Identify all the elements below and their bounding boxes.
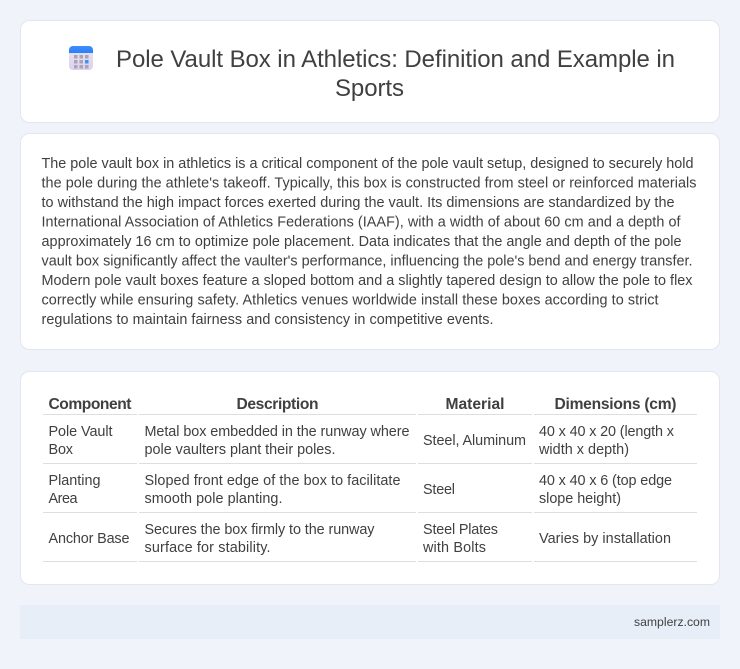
table row: anchor base: Secures the box firmly to the runway [144,522,375,538]
table row: planting area: Area [48,491,78,507]
table row: pole vault box: Pole Vault [48,424,112,440]
table row: pole vault box: Steel, Aluminum [423,433,526,449]
text block: description paragraph: International Association of Athletics Federations (IAAF), with a width of about 60 cm and a depth of [42,214,682,230]
table row: pole vault box [48,424,675,458]
table row: anchor base: with Bolts [422,540,486,556]
table row: anchor base [48,522,671,556]
table row: planting area: Steel [423,482,455,498]
footer: samplerz.com [634,615,710,629]
table header row: Dimensions (cm) [554,396,676,413]
table row: planting area: Sloped front edge of the box to facilitate [144,473,400,489]
table header row: Component [48,396,132,413]
table row: pole vault box: 40 x 40 x 20 (length x [539,424,675,440]
text block: description paragraph: regulations to maintain fairness and consistency in competitive events. [42,312,494,328]
text block: description paragraph: approximately 16 cm to optimize pole placement. Data indicates that the angle and depth of the pole [42,234,682,250]
table header row: Description [236,396,318,413]
text block: description paragraph: The pole vault box in athletics is a critical component of the pole vault setup, designed to securely hold [42,156,694,172]
footer [20,605,720,639]
table row: pole vault box: Box [48,442,74,458]
panel: header [20,20,720,122]
text block: description paragraph [42,156,696,328]
table row: anchor base: Varies by installation [539,531,671,547]
text block: description paragraph: the pole during the athlete's takeoff. Typically, this box is constructed from steel or reinforced materials [42,176,696,192]
table row: pole vault box: width x depth) [538,442,629,458]
text block: description paragraph: vault box significantly affect the vaulter's performance, influencing the pole's bend and energy transfer. [42,254,692,270]
icon: calendar [69,46,93,70]
table row: anchor base: Anchor Base [48,531,130,547]
panel: description [20,134,720,350]
table row: anchor base: surface for stability. [144,540,270,556]
table row: pole vault box: Metal box embedded in the runway where [144,424,410,440]
panel: components table [20,372,720,584]
table row: planting area: 40 x 40 x 6 (top edge [539,473,672,489]
text block: description paragraph: to withstand the high impact forces exerted during the vault. Its dimensions are standardized by the [42,195,674,211]
table header row: Material [446,396,504,413]
table header row [48,396,676,413]
table row: planting area: Planting [48,473,100,489]
text block: description paragraph: Modern pole vault boxes feature a sloped bottom and a slightly tapered design to allow the pole to flex [42,273,693,289]
title: Pole Vault Box in Athletics: Definition and Example in [116,46,675,73]
table row: planting area [48,473,672,507]
table row: planting area: slope height) [539,491,621,507]
title [116,46,675,102]
title: Sports [335,75,404,102]
text block: description paragraph: correctly while ensuring safety. Athletics venues worldwide install these boxes according to strict [42,292,658,308]
table row: planting area: smooth pole planting. [144,491,282,507]
table row: pole vault box: pole vaulters plant their poles. [144,442,336,458]
table row: anchor base: Steel Plates [423,522,498,538]
